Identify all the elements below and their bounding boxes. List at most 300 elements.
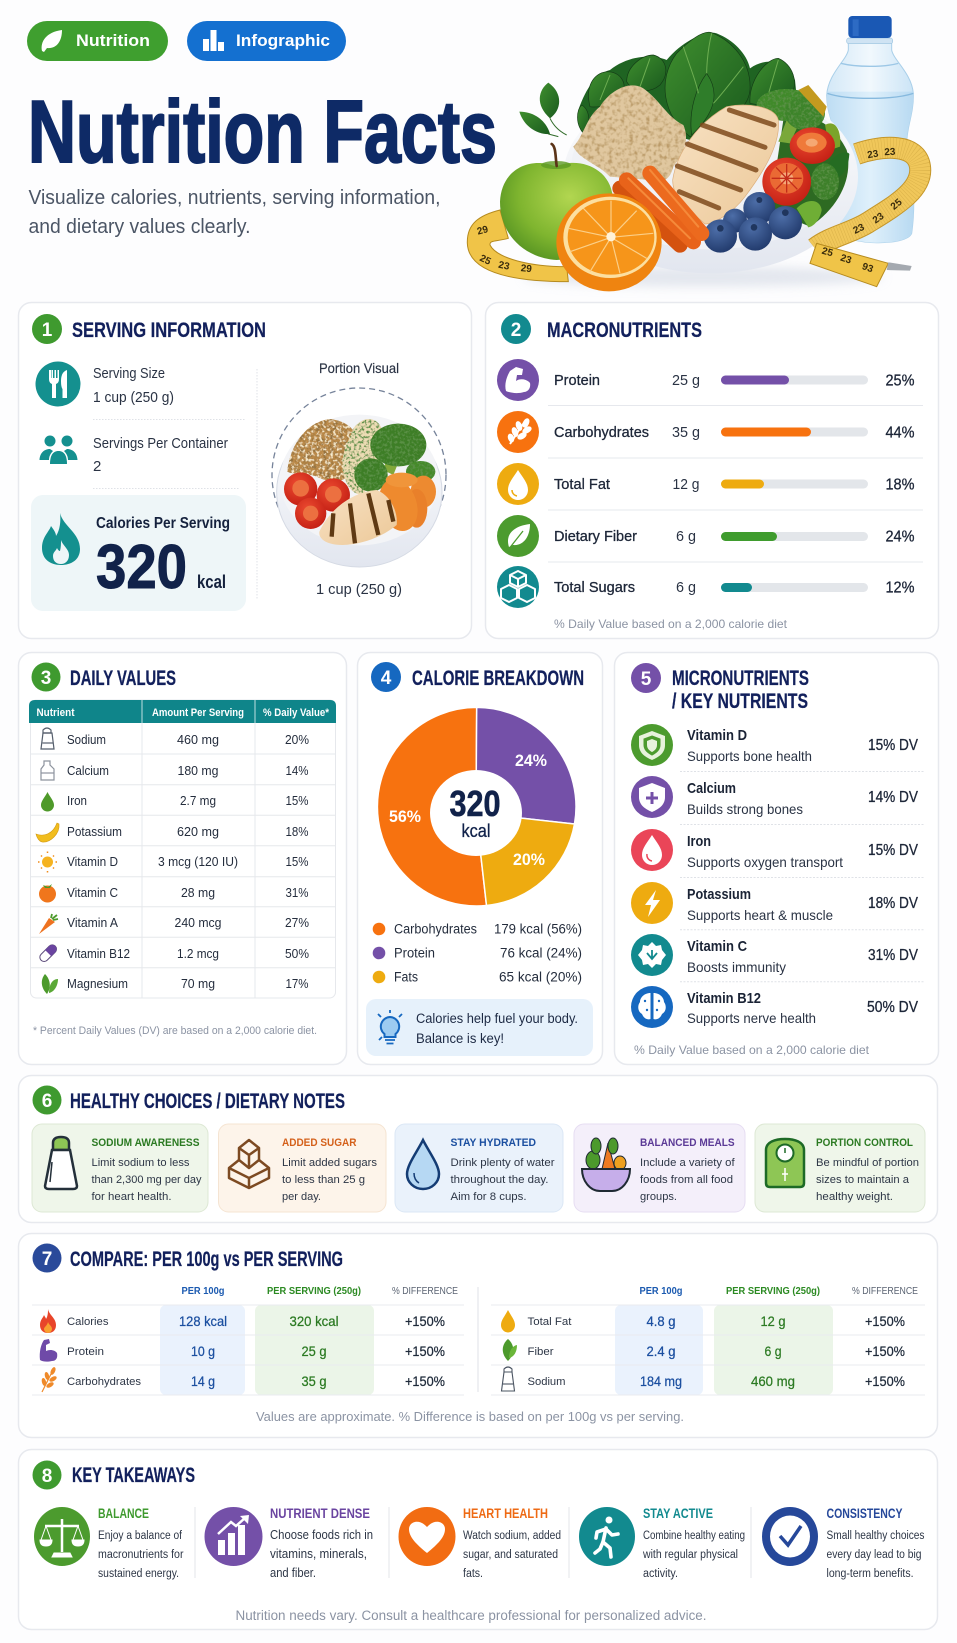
- row: iron: 2.7 mg: [180, 793, 216, 808]
- tape right: [810, 147, 920, 287]
- card: added sugar: Limit added sugars: [282, 1157, 377, 1169]
- row: vitamin C: [631, 934, 918, 976]
- donut chart: 56%: [389, 807, 421, 826]
- row: dietary fiber: [497, 515, 914, 557]
- row: vitamin D: Vitamin D: [67, 854, 118, 869]
- row: vitamin B12: [631, 986, 918, 1028]
- tip callout: [366, 999, 593, 1056]
- legend: Protein: [394, 946, 435, 960]
- card: sodium awareness: than 2,300 mg per day: [92, 1174, 202, 1186]
- calories box: 320: [96, 533, 187, 602]
- icon: flame: [42, 513, 80, 565]
- icon: bicep: [40, 1339, 57, 1362]
- tip callout: Calories help fuel your body.: [416, 1011, 578, 1026]
- heading: / KEY NUTRIENTS: [672, 690, 808, 713]
- row: total sugars: 12%: [886, 580, 914, 596]
- right table: 460 mg: [751, 1373, 795, 1389]
- icon: bowl of vegetables: [582, 1138, 630, 1191]
- card: stay hydrated: Aim for 8 cups.: [450, 1191, 526, 1203]
- chicken: [673, 105, 779, 224]
- heading: MICRONUTRIENTS: [672, 667, 809, 690]
- donut chart: kcal: [462, 821, 490, 841]
- rice: [573, 85, 686, 181]
- table header: Amount Per Serving: [152, 707, 244, 719]
- row: protein: 25 g: [672, 372, 700, 389]
- legend: 179 kcal (56%): [494, 922, 582, 936]
- row: vitamin D: [631, 724, 918, 766]
- row: vitamin C: 28 mg: [181, 885, 215, 900]
- panel: serving information: [18, 302, 472, 638]
- right table: PER SERVING (250g): [726, 1285, 820, 1297]
- right table: +150%: [865, 1313, 905, 1329]
- illustration: portion bowl: [277, 415, 442, 567]
- card: portion control: sizes to maintain a: [816, 1174, 910, 1186]
- left table: Carbohydrates: [67, 1376, 142, 1388]
- footnote: % Daily Value based on a 2,000 calorie diet: [634, 1043, 870, 1057]
- row: vitamin C: 31%: [286, 885, 309, 900]
- row: vitamin C: [39, 884, 309, 902]
- legend: 76 kcal (24%): [500, 946, 582, 960]
- icon: banana: [36, 823, 59, 842]
- tape right: 23: [852, 222, 867, 237]
- right table: PER 100g: [640, 1285, 682, 1297]
- broccoli small: [811, 163, 839, 200]
- row: dietary fiber: 6 g: [676, 528, 696, 545]
- badge 5: [631, 663, 661, 693]
- tape right: 25: [889, 197, 905, 213]
- right table: 184 mg: [640, 1373, 682, 1389]
- tape right: 23: [866, 148, 880, 161]
- panel: micronutrients: [614, 652, 938, 1064]
- row: protein: [497, 359, 914, 401]
- card: balanced meals: foods from all food: [640, 1174, 733, 1186]
- badge 3: [32, 662, 60, 692]
- panel: macronutrients: [486, 302, 938, 638]
- takeaway: heart health: sugar, and saturated: [463, 1549, 558, 1561]
- card: portion control: PORTION CONTROL: [816, 1137, 913, 1149]
- bowl: [563, 80, 858, 273]
- card: portion control: Be mindful of portion: [816, 1157, 919, 1169]
- right table: % DIFFERENCE: [852, 1285, 918, 1297]
- row: vitamin D: [38, 852, 309, 872]
- left table: 14 g: [191, 1373, 215, 1389]
- row: magnesium: 17%: [286, 976, 309, 991]
- right table: Total Fat: [528, 1316, 572, 1328]
- row: vitamin C: Boosts immunity: [687, 959, 786, 975]
- servings per container: 2: [93, 458, 101, 475]
- row: total sugars: Total Sugars: [554, 579, 635, 596]
- card: added sugar: ADDED SUGAR: [282, 1137, 357, 1149]
- takeaway: balance: Enjoy a balance of: [98, 1530, 183, 1542]
- card: balanced meals: groups.: [640, 1191, 677, 1203]
- row: iron: Iron: [687, 833, 711, 850]
- badge 6: [32, 1086, 62, 1114]
- row: calcium: Builds strong bones: [687, 801, 803, 817]
- takeaway: stay active: STAY ACTIVE: [643, 1506, 713, 1521]
- row: vitamin C: 31% DV: [868, 947, 918, 964]
- footer note: Nutrition needs vary. Consult a healthcare professional for personalized advice.: [236, 1608, 706, 1623]
- left table: +150%: [405, 1373, 445, 1389]
- footnote: % Daily Value based on a 2,000 calorie diet: [554, 617, 788, 631]
- icon: runner: [595, 1516, 618, 1557]
- takeaway: nutrient dense: [204, 1506, 373, 1580]
- greens: [798, 85, 827, 117]
- takeaway: balance: [34, 1506, 184, 1580]
- left table: % DIFFERENCE: [392, 1285, 458, 1297]
- panel: compare: [18, 1234, 938, 1438]
- badge 7: 7: [42, 1249, 52, 1270]
- badge 4: 4: [381, 668, 392, 689]
- servings per container: [93, 435, 228, 475]
- takeaway: stay active: [579, 1506, 745, 1580]
- dashed portion circle: [272, 388, 446, 562]
- icon: leaf: [42, 30, 62, 52]
- card: balanced meals: [574, 1124, 745, 1212]
- calories box: kcal: [197, 572, 226, 592]
- row: vitamin D: Supports bone health: [687, 748, 812, 764]
- tape right: 25: [821, 246, 835, 259]
- takeaway: stay active: activity.: [643, 1568, 678, 1580]
- icon: leaves: [42, 974, 58, 994]
- row: vitamin B12: 50% DV: [867, 999, 918, 1016]
- row: dietary fiber: Dietary Fiber: [554, 528, 637, 545]
- card: stay hydrated: throughout the day.: [450, 1174, 548, 1186]
- icon: light bulb: [378, 1010, 402, 1044]
- left table: 25 g: [302, 1343, 326, 1359]
- badge 6: 6: [42, 1091, 52, 1112]
- takeaway: nutrient dense: Choose foods rich in: [270, 1528, 373, 1542]
- broccoli: [757, 89, 825, 143]
- row: calcium: 14%: [286, 763, 309, 778]
- takeaway: consistency: every day lead to big: [826, 1549, 922, 1561]
- icon: green drop: [41, 792, 54, 812]
- row: vitamin D: Vitamin D: [687, 727, 747, 744]
- title: Nutrition Facts: [28, 82, 497, 181]
- takeaway: nutrient dense: vitamins, minerals,: [270, 1547, 367, 1561]
- card: stay hydrated: Drink plenty of water: [450, 1157, 555, 1169]
- panel: healthy choices: [18, 1076, 938, 1222]
- table header: Nutrient: [36, 707, 75, 719]
- heading: DAILY VALUES: [70, 667, 176, 690]
- detached leaves: [519, 83, 567, 137]
- row: iron: Iron: [67, 793, 87, 808]
- row: carbohydrates: 35 g: [672, 424, 700, 441]
- table: [29, 700, 336, 998]
- takeaway: heart health: fats.: [463, 1568, 483, 1580]
- tag: Infographic: [187, 21, 346, 61]
- footnote: * Percent Daily Values (DV) are based on a 2,000 calorie diet.: [33, 1025, 317, 1037]
- row: vitamin A: 240 mcg: [174, 915, 222, 930]
- icon: salt shaker: [45, 1137, 77, 1189]
- icon: milk bottle: [41, 761, 54, 780]
- row: magnesium: [42, 974, 309, 994]
- panel: key takeaways: [18, 1450, 938, 1630]
- row: total fat: 18%: [886, 476, 914, 494]
- icon: people: [40, 436, 78, 464]
- right table: +150%: [865, 1343, 905, 1359]
- row: vitamin A: Vitamin A: [67, 915, 118, 930]
- left table: 10 g: [191, 1343, 215, 1359]
- table header: % Daily Value*: [263, 707, 330, 719]
- tape left: 29: [520, 263, 533, 275]
- row: total sugars: 6 g: [676, 579, 696, 596]
- takeaway: nutrient dense: and fiber.: [270, 1566, 316, 1580]
- row: sodium: [41, 728, 309, 749]
- row: potassium: Potassium: [687, 886, 751, 903]
- row: magnesium: 70 mg: [181, 976, 215, 991]
- icon: capsule: [38, 943, 58, 963]
- icon: heart: [409, 1522, 445, 1553]
- left table: Protein: [67, 1346, 104, 1358]
- left table: 320 kcal: [290, 1313, 338, 1329]
- note: Values are approximate. % Difference is based on per 100g vs per serving.: [256, 1409, 684, 1424]
- icon: sugar cubes: [229, 1140, 269, 1188]
- heading: KEY TAKEAWAYS: [72, 1464, 195, 1487]
- portion visual label: Portion Visual: [319, 360, 399, 376]
- row: potassium: 18% DV: [868, 895, 918, 912]
- left table: +150%: [405, 1313, 445, 1329]
- tip callout: Balance is key!: [416, 1031, 504, 1046]
- legend: 65 kcal (20%): [499, 970, 582, 984]
- row: protein: 25%: [886, 372, 914, 390]
- right table: +150%: [865, 1373, 905, 1389]
- left table: 128 kcal: [179, 1313, 227, 1329]
- card: balanced meals: Include a variety of: [640, 1157, 736, 1169]
- badge 2: [501, 314, 531, 344]
- column highlights: [160, 1305, 833, 1395]
- tomatoes: [762, 127, 835, 206]
- tape right: 23: [839, 253, 853, 267]
- card: portion control: healthy weight.: [816, 1191, 893, 1203]
- row: vitamin B12: Supports nerve health: [687, 1010, 816, 1026]
- donut chart: 20%: [513, 850, 545, 869]
- row: protein: Protein: [554, 372, 600, 389]
- row: calcium: Calcium: [67, 763, 109, 778]
- card: sodium awareness: [32, 1124, 208, 1212]
- serving size: Serving Size: [93, 365, 165, 382]
- row: iron: [631, 829, 918, 871]
- legend: Fats: [394, 970, 418, 984]
- row: calcium: [631, 776, 918, 818]
- card: stay hydrated: STAY HYDRATED: [450, 1137, 536, 1149]
- takeaway: heart health: [398, 1506, 561, 1580]
- row: vitamin A: 27%: [285, 915, 309, 930]
- row: vitamin C: Vitamin C: [687, 938, 747, 955]
- icon: wheat: [42, 1367, 57, 1392]
- row: carbohydrates: [497, 411, 914, 453]
- icon: orange: [39, 884, 56, 902]
- tag: Infographic: Infographic: [236, 31, 330, 50]
- takeaway: heart health: Watch sodium, added: [463, 1530, 561, 1542]
- legend: Carbohydrates: [394, 922, 477, 936]
- donut chart: 320: [450, 783, 500, 824]
- row: potassium: Potassium: [67, 824, 122, 839]
- table header: [29, 700, 336, 723]
- card: sodium awareness: for heart health.: [92, 1191, 172, 1203]
- portion size: 1 cup (250 g): [316, 581, 402, 598]
- icon: water drop: [407, 1140, 439, 1189]
- row: iron: 15%: [286, 793, 309, 808]
- card: added sugar: per day.: [282, 1191, 321, 1203]
- takeaway: stay active: Combine healthy eating: [643, 1530, 745, 1542]
- left table: PER 100g: [182, 1285, 224, 1297]
- row: potassium: [631, 882, 918, 924]
- icon: oil drop: [501, 1310, 515, 1332]
- row: calcium: Calcium: [687, 780, 736, 797]
- orange: [556, 193, 662, 291]
- right table: [501, 1285, 918, 1391]
- left table: 35 g: [302, 1373, 326, 1389]
- row: carbohydrates: Carbohydrates: [554, 424, 649, 441]
- takeaway: consistency: long-term benefits.: [826, 1568, 914, 1580]
- row: vitamin B12: Vitamin B12: [67, 946, 130, 961]
- row: magnesium: Magnesium: [67, 976, 128, 991]
- icon: bars: [203, 30, 224, 51]
- heading: MACRONUTRIENTS: [547, 319, 702, 342]
- row: potassium: Supports heart & muscle: [687, 907, 833, 923]
- takeaway: consistency: CONSISTENCY: [826, 1506, 902, 1521]
- row: calcium: [41, 761, 309, 780]
- takeaway: consistency: [762, 1506, 925, 1580]
- takeaway: heart health: HEART HEALTH: [463, 1506, 548, 1521]
- card: balanced meals: BALANCED MEALS: [640, 1137, 735, 1149]
- row: vitamin B12: 50%: [285, 946, 309, 961]
- tape left: [467, 210, 568, 282]
- row: total sugars: [497, 566, 914, 608]
- right table: 12 g: [760, 1313, 786, 1329]
- tape left: 25: [478, 253, 493, 268]
- row: vitamin D: 3 mcg (120 IU): [158, 854, 238, 869]
- subtitle: Visualize calories, nutrients, serving information,: [28, 187, 440, 209]
- badge 1: 1: [42, 320, 53, 341]
- heading: CALORIE BREAKDOWN: [412, 667, 584, 690]
- row: iron: [41, 792, 309, 812]
- icon: sun: [38, 852, 57, 872]
- calories box: [31, 495, 246, 611]
- icon: fork and knife: [36, 362, 80, 406]
- takeaway: balance: macronutrients for: [98, 1549, 184, 1561]
- icon: leaves: [503, 1339, 517, 1361]
- badge 7: [32, 1244, 62, 1272]
- row: vitamin C: Vitamin C: [67, 885, 118, 900]
- row: calcium: 180 mg: [178, 763, 218, 778]
- icon: scale: [40, 1519, 84, 1557]
- panel: calorie breakdown: [358, 652, 602, 1064]
- serving size: [93, 365, 174, 406]
- row: calcium: 14% DV: [868, 789, 918, 806]
- tag: Nutrition: [27, 21, 168, 61]
- tape right: 93: [860, 261, 875, 276]
- servings per container: Servings Per Container: [93, 435, 228, 452]
- takeaway: balance: sustained energy.: [98, 1568, 179, 1580]
- row: vitamin D: 15%: [286, 854, 309, 869]
- badge 4: [371, 662, 401, 692]
- icon: flame: [40, 1309, 56, 1333]
- row: iron: 15% DV: [868, 842, 918, 859]
- tag: Nutrition: Nutrition: [76, 31, 150, 50]
- panel: daily values: [18, 652, 346, 1064]
- row: dietary fiber: 24%: [886, 528, 914, 546]
- carrots: [620, 170, 702, 245]
- row: sodium: 460 mg: [177, 732, 219, 747]
- donut chart: 24%: [515, 751, 547, 770]
- right table: 2.4 g: [646, 1343, 676, 1359]
- row: vitamin D: 15% DV: [868, 737, 918, 754]
- badge 1: [32, 314, 62, 344]
- icon: weighing scale: [766, 1139, 804, 1187]
- takeaway: stay active: with regular physical: [642, 1549, 738, 1561]
- row: vitamin B12: [38, 943, 309, 963]
- blueberries: [704, 192, 802, 253]
- row: potassium: 620 mg: [177, 824, 219, 839]
- spinach leaves: [577, 32, 797, 140]
- icon: carrot: [39, 914, 58, 934]
- water bottle: [825, 16, 917, 248]
- left table: PER SERVING (250g): [267, 1285, 361, 1297]
- row: iron: Supports oxygen transport: [687, 854, 843, 870]
- takeaway: balance: BALANCE: [98, 1506, 149, 1521]
- badge 3: 3: [41, 668, 51, 689]
- card: sodium awareness: SODIUM AWARENESS: [92, 1137, 200, 1149]
- inner greens backing: [770, 117, 848, 227]
- row: sodium: Sodium: [67, 732, 106, 747]
- tape right: 23: [884, 147, 896, 158]
- card: added sugar: to less than 25 g: [282, 1174, 365, 1186]
- heading: [672, 667, 809, 713]
- row: vitamin A: [39, 914, 309, 934]
- apple: [500, 144, 613, 260]
- tape left: 23: [497, 260, 511, 273]
- tape right: 23: [871, 211, 887, 226]
- right table: Fiber: [528, 1346, 554, 1358]
- legend: [373, 922, 582, 984]
- row: sodium: 20%: [285, 732, 309, 747]
- left table: [40, 1285, 458, 1392]
- row: vitamin B12: Vitamin B12: [687, 990, 761, 1007]
- row: total fat: [497, 463, 914, 505]
- row: potassium: 18%: [286, 824, 309, 839]
- takeaway: consistency: Small healthy choices: [826, 1530, 925, 1542]
- card: sodium awareness: Limit sodium to less: [92, 1157, 190, 1169]
- badge 2: 2: [511, 320, 521, 341]
- right table: 4.8 g: [646, 1313, 676, 1329]
- subtitle: and dietary values clearly.: [28, 216, 250, 238]
- icon: rising chart: [218, 1515, 249, 1555]
- card: added sugar: [218, 1124, 386, 1212]
- row: potassium: [36, 823, 309, 842]
- row: total fat: 12 g: [672, 476, 700, 493]
- illustration: healthy food bowl with apple, orange, water bottle and measuring tape: [467, 16, 920, 291]
- icon: salt shaker: [502, 1367, 514, 1391]
- heading: COMPARE: PER 100g vs PER SERVING: [70, 1248, 343, 1271]
- calories box: Calories Per Serving: [96, 515, 230, 532]
- left table: Calories: [67, 1316, 109, 1328]
- badge 8: [32, 1460, 62, 1490]
- serving size: 1 cup (250 g): [93, 389, 174, 406]
- card: portion control: [755, 1124, 925, 1212]
- icon: check mark: [770, 1516, 810, 1558]
- heading: SERVING INFORMATION: [72, 319, 266, 342]
- tape left: 29: [476, 224, 490, 238]
- row: total fat: Total Fat: [554, 476, 611, 493]
- card: stay hydrated: [395, 1124, 563, 1212]
- donut chart: [377, 707, 576, 906]
- right table: Sodium: [528, 1376, 566, 1388]
- row: vitamin B12: 1.2 mcg: [177, 946, 219, 961]
- left table: +150%: [405, 1343, 445, 1359]
- heading: HEALTHY CHOICES / DIETARY NOTES: [70, 1090, 345, 1113]
- row: carbohydrates: 44%: [886, 424, 914, 442]
